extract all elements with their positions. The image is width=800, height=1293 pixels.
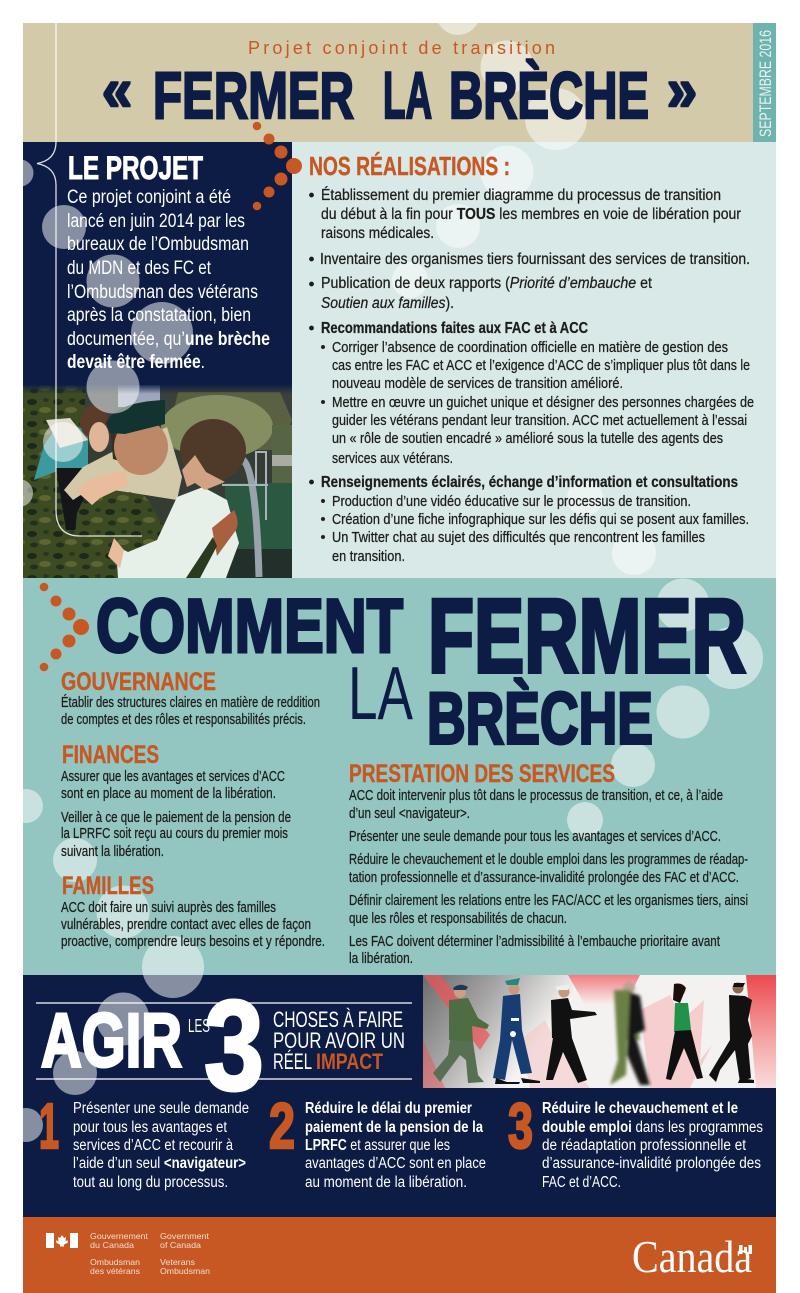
- list: achievements: raisons médicales.: [321, 225, 434, 242]
- step 1: 1: [39, 1090, 59, 1162]
- text: government identifiers: Gouvernement: [90, 1231, 149, 1241]
- big heading: [96, 578, 746, 760]
- image: people walking, from soldier to civilian: [423, 975, 776, 1088]
- step 2: Réduire le délai du premier: [305, 1100, 472, 1117]
- block: familles: vulnérables, prendre contact avec elles de façon: [61, 917, 311, 933]
- list: achievements: Production d’une vidéo éducative sur le processus de transition.: [332, 494, 691, 510]
- block: prestation des services: que les rôles et responsabilités de chacun.: [349, 911, 567, 927]
- list: achievements: du début à la fin pour TOUS les membres en voie de libération pour: [321, 206, 741, 223]
- step 1: Présenter une seule demande: [73, 1100, 249, 1117]
- list: achievements: Un Twitter chat au sujet des difficultés que rencontrent les familles: [332, 530, 705, 546]
- text block: project description: du MDN et des FC et: [67, 258, 212, 279]
- block: gouvernance: GOUVERNANCE: [61, 668, 216, 696]
- main title: LA: [383, 58, 432, 132]
- big heading: LA: [348, 651, 413, 735]
- block: familles: proactive, comprendre leurs besoins et y répondre.: [61, 934, 325, 950]
- subheading: choses à faire: CHOSES À FAIRE: [273, 1007, 403, 1032]
- list: achievements: Soutien aux familles).: [321, 295, 454, 312]
- text block: project description: Ce projet conjoint a été: [67, 187, 231, 208]
- step 3: de réadaptation professionnelle et: [542, 1137, 747, 1154]
- dots: middle arrow: [40, 583, 89, 671]
- step 2: 2: [269, 1090, 295, 1162]
- panel: agir: [23, 975, 776, 1217]
- text: government identifiers: Ombudsman: [160, 1266, 210, 1276]
- main title: BRÈCHE: [449, 58, 649, 132]
- list: achievements: Établissement du premier diagramme du processus de transition: [321, 187, 721, 204]
- list: achievements: services aux vétérans.: [332, 451, 453, 467]
- step 3: 3: [508, 1090, 533, 1162]
- panel: comment fermer la brèche: [23, 578, 776, 975]
- heading: agir les 3: AGIR: [41, 998, 182, 1084]
- heading: agir les 3: LES: [188, 1016, 210, 1036]
- text: government identifiers: Veterans: [160, 1257, 195, 1267]
- block: gouvernance: Établir des structures claires en matière de reddition: [61, 694, 320, 711]
- text block: project description: lancé en juin 2014 par les: [67, 211, 245, 232]
- text block: project description: après la constatation, bien: [67, 305, 251, 326]
- list: achievements: Recommandations faites aux FAC et à ACC: [321, 320, 588, 337]
- list: achievements: en transition.: [332, 549, 405, 565]
- step 3: [508, 1090, 763, 1191]
- main title: [102, 56, 697, 132]
- step 2: LPRFC et assurer que les: [305, 1137, 450, 1154]
- step 3: Réduire le chevauchement et le: [542, 1100, 738, 1117]
- block: finances: FINANCES: [62, 741, 159, 769]
- block: familles: ACC doit faire un suivi auprès des familles: [61, 900, 276, 916]
- main title: «: [102, 56, 132, 123]
- block: finances: Veiller à ce que le paiement de la pension de: [61, 810, 291, 826]
- step 1: tout au long du processus.: [73, 1174, 228, 1191]
- panel: footer: [23, 1217, 776, 1293]
- block: finances: la LPRFC soit reçu au cours du premier mois: [61, 826, 288, 842]
- text block: project description: devait être fermée.: [67, 352, 205, 373]
- subheading: choses à faire: IMPACT: [316, 1049, 383, 1074]
- list: achievements: nouveau modèle de services de transition amélioré.: [332, 376, 623, 392]
- list: achievements: [309, 187, 754, 565]
- step 3: FAC et d’ACC.: [542, 1174, 621, 1191]
- text block: project description: [67, 187, 270, 373]
- subheading: choses à faire: POUR AVOIR UN: [273, 1028, 405, 1053]
- block: finances: suivant la libération.: [61, 844, 164, 860]
- main title: »: [667, 56, 697, 123]
- heading: le projet: LE PROJET: [68, 150, 203, 186]
- subtitle: Projet conjoint de transition: [248, 38, 555, 58]
- big heading: BRÈCHE: [427, 678, 653, 760]
- text block: project description: l’Ombudsman des vétérans: [67, 282, 258, 303]
- block: familles: FAMILLES: [62, 872, 154, 900]
- block: finances: [61, 741, 291, 860]
- block: gouvernance: [61, 668, 320, 728]
- step 1: l’aide d’un seul <navigateur>: [73, 1155, 246, 1172]
- step 2: [269, 1090, 486, 1191]
- panel: le projet: [23, 142, 292, 578]
- heading: agir les 3: 3: [204, 975, 264, 1118]
- block: prestation des services: PRESTATION DES SERVICES: [349, 760, 615, 788]
- subheading: choses à faire: RÉEL: [273, 1049, 312, 1074]
- photo: soldier hugging his children: [23, 385, 292, 578]
- text: government identifiers: Ombudsman: [90, 1257, 140, 1267]
- block: prestation des services: [349, 760, 748, 967]
- step 2: paiement de la pension de la: [305, 1119, 483, 1136]
- list: achievements: Publication de deux rapports (Priorité d’embauche et: [321, 275, 653, 292]
- block: finances: Assurer que les avantages et services d’ACC: [61, 769, 285, 785]
- block: familles: [61, 872, 325, 950]
- list: achievements: Corriger l’absence de coordination officielle en matière de gestion des: [332, 340, 728, 356]
- overlay: bracket line and orange dots: [36, 23, 302, 672]
- step 2: avantages d’ACC sont en place: [305, 1155, 486, 1172]
- text: government identifiers: du Canada: [90, 1240, 134, 1250]
- text: government identifiers: des vétérans: [90, 1266, 140, 1276]
- step 2: au moment de la libération.: [305, 1174, 467, 1191]
- panel: nos réalisations: [292, 142, 776, 578]
- logo: canada wordmark: Canada: [632, 1232, 752, 1282]
- big heading: COMMENT: [96, 584, 403, 669]
- heading: agir les 3: [41, 974, 264, 1118]
- heading: nos réalisations: NOS RÉALISATIONS :: [309, 151, 510, 181]
- text block: project description: bureaux de l’Ombudsman: [67, 234, 249, 255]
- panel: header: [23, 23, 753, 142]
- block: finances: sont en place au moment de la libération.: [61, 786, 276, 802]
- rules: [36, 1003, 412, 1079]
- bracket line: [37, 23, 142, 536]
- step 1: pour tous les avantages et: [73, 1119, 228, 1136]
- text: government identifiers: [90, 1231, 210, 1276]
- step 1: [39, 1090, 249, 1191]
- block: prestation des services: d’un seul <navigateur>.: [349, 806, 470, 822]
- text block: project description: documentée, qu’une brèche: [67, 329, 270, 350]
- dots: top arrow: [253, 122, 302, 210]
- main title: FERMER: [153, 58, 354, 132]
- subheading: choses à faire: [273, 1007, 405, 1074]
- text: government identifiers: Government: [160, 1231, 210, 1241]
- block: gouvernance: de comptes et des rôles et responsabilités précis.: [61, 712, 306, 728]
- icon: canadian flag: [46, 1233, 78, 1248]
- text: government identifiers: of Canada: [160, 1240, 201, 1250]
- list: achievements: un « rôle de soutien encadré » amélioré sous la tutelle des agents des: [332, 431, 723, 447]
- step 1: services d’ACC et recourir à: [73, 1137, 233, 1154]
- block: prestation des services: la libération.: [349, 951, 413, 967]
